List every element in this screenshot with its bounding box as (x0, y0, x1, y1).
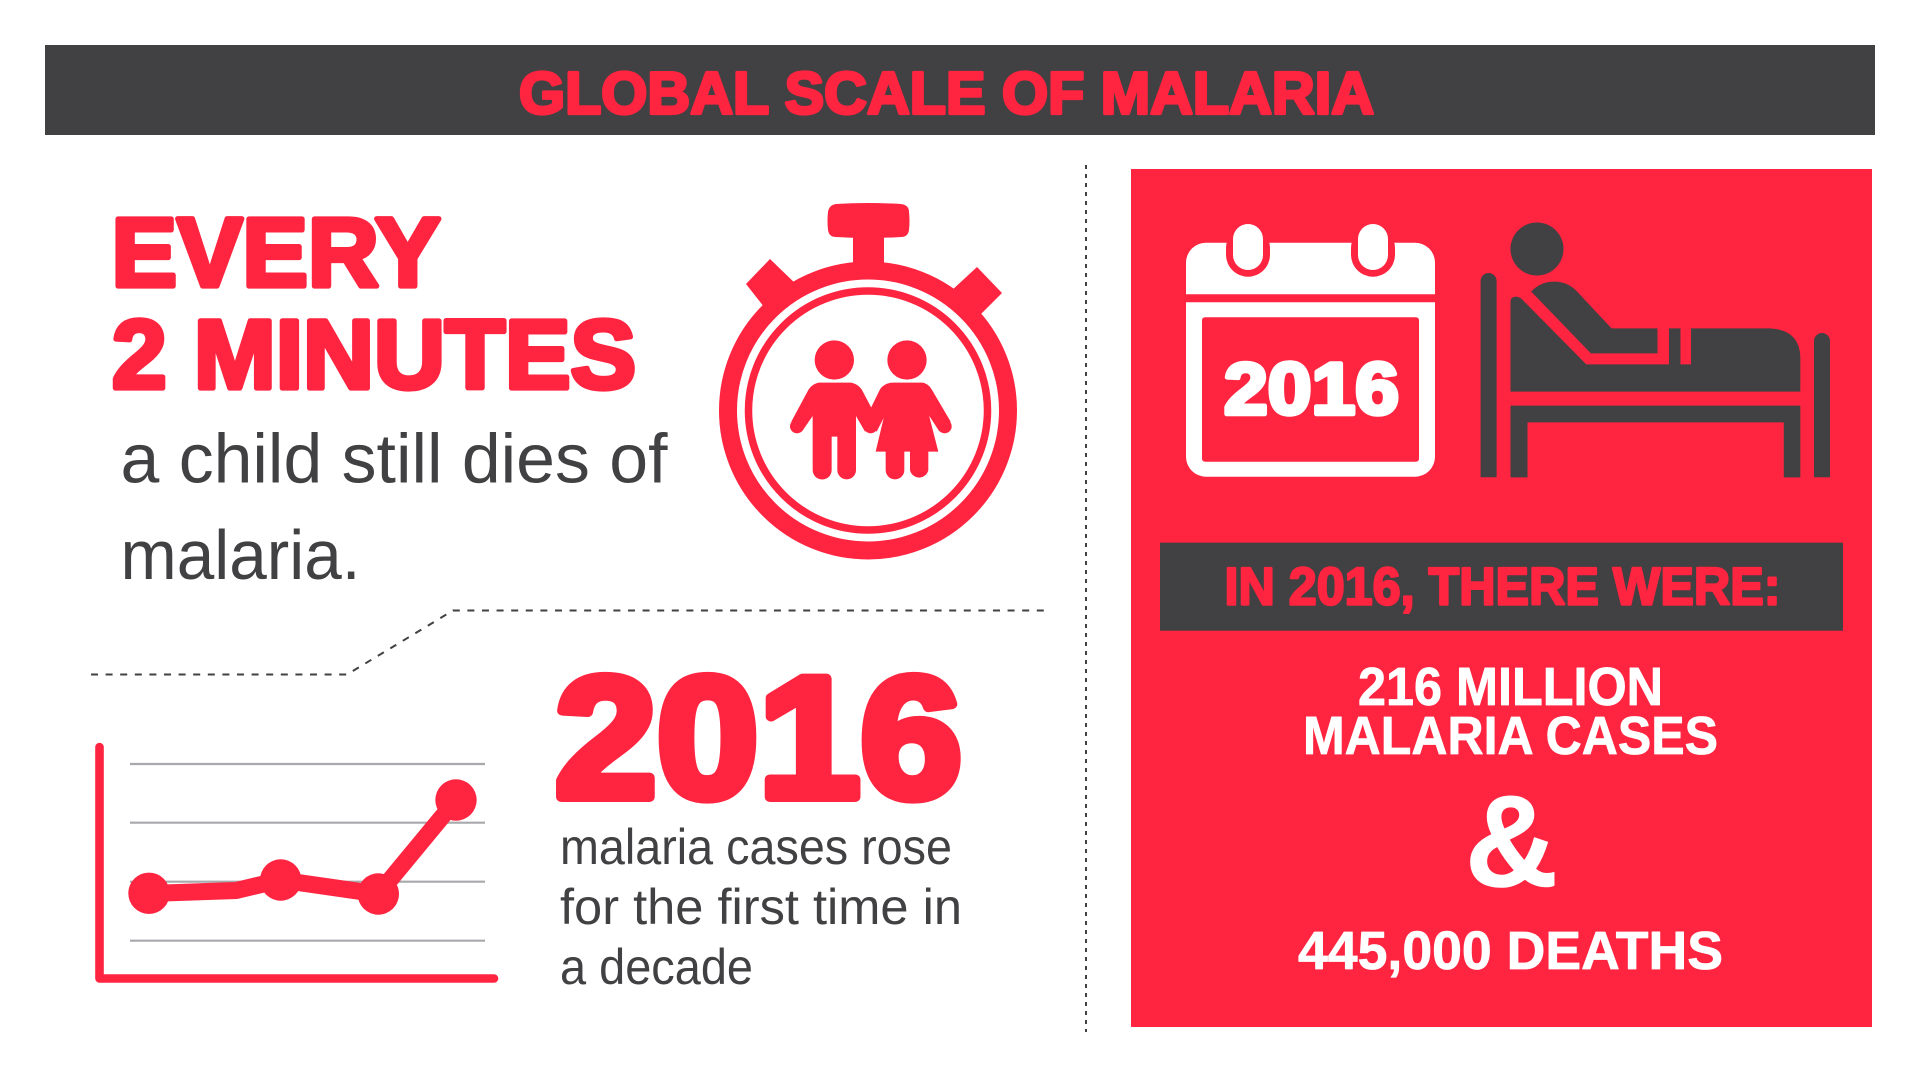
banner: in 2016 there were (1160, 543, 1843, 631)
chart axes (100, 747, 494, 978)
dashed divider: left panel (91, 610, 1044, 674)
text: malaria cases rose: a decade (560, 939, 753, 995)
icon: patient in bed (1481, 222, 1830, 477)
text: a child still dies of malaria: malaria. (120, 516, 360, 594)
big number 2016: 2016 (555, 642, 962, 834)
text: a child still dies of malaria (120, 420, 668, 594)
chart data line (128, 779, 477, 915)
stat: 216 million malaria cases: MALARIA CASES (1303, 706, 1718, 766)
heading: every 2 minutes: 2 MINUTES (112, 300, 636, 409)
stat: 216 million malaria cases: 216 MILLION (1358, 657, 1663, 717)
banner: in 2016 there were: IN 2016, THERE WERE: (1224, 558, 1780, 616)
stat: 445,000 deaths: 445,000 DEATHS (1298, 921, 1723, 981)
text: malaria cases rose: for the first time in (560, 879, 962, 935)
text: malaria cases rose (560, 819, 962, 995)
dotted vertical divider (1085, 165, 1087, 1032)
title banner (45, 45, 1875, 135)
ampersand: & (1465, 768, 1558, 914)
line chart (100, 747, 494, 978)
panel: 2016 statistics (1131, 169, 1872, 1027)
text: a child still dies of malaria: a child still dies of (120, 420, 668, 498)
icon: stopwatch with two children (728, 203, 1008, 550)
title text: GLOBAL SCALE OF MALARIA (519, 60, 1374, 126)
calendar year: 2016 (1224, 349, 1399, 430)
heading: every 2 minutes: EVERY (112, 198, 440, 307)
icon: children (790, 340, 952, 479)
text: malaria cases rose: malaria cases rose (560, 819, 952, 875)
heading: every 2 minutes (112, 198, 636, 409)
stat: 216 million malaria cases (1303, 657, 1718, 766)
icon: calendar (1186, 224, 1435, 477)
